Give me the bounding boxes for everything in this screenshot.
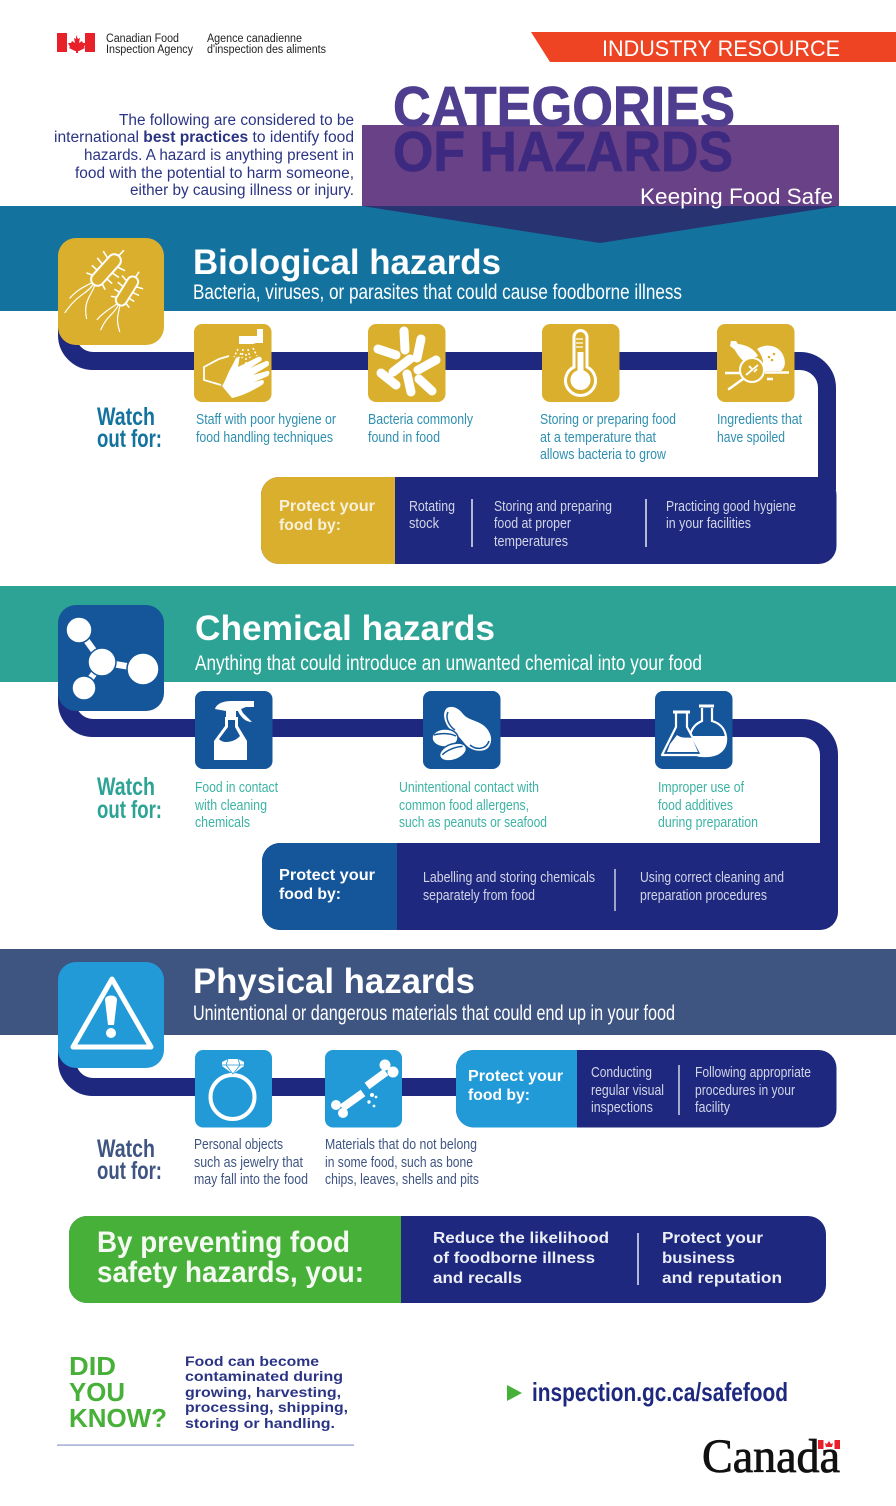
captions: biological risks: found in food: [368, 429, 440, 446]
captions: chemical risks: chemicals: [195, 814, 250, 831]
icon: spoiled ingredients: [717, 324, 794, 402]
logo: Canadian Food Inspection Agency: Inspection Agency: [106, 44, 193, 56]
icon: flasks: [655, 691, 732, 769]
captions: biological risks: Ingredients that: [717, 411, 803, 428]
heading: did you know: YOU: [69, 1377, 125, 1407]
protect box: chemical: Protect your: [279, 867, 375, 884]
protect box: biological: in your facilities: [666, 515, 751, 532]
label: watch out for: out for:: [97, 1157, 162, 1185]
protect box: chemical: food by:: [279, 886, 341, 903]
panel: chemical hazards: [0, 586, 896, 930]
text: contamination fact: contaminated during: [185, 1368, 343, 1384]
banner: industry resource: [531, 32, 896, 62]
subtitle: chemical: Anything that could introduce an unwanted chemical into your food: [195, 652, 702, 675]
protect box: biological: food at proper: [494, 515, 571, 532]
captions: biological risks: food handling techniques: [196, 429, 333, 446]
protect box: biological: Protect your: [279, 498, 375, 515]
logo: Canada wordmark: Canada: [702, 1430, 840, 1483]
protect box: biological: food by:: [279, 517, 341, 534]
captions: physical risks: in some food, such as bone: [325, 1154, 473, 1171]
protect box: physical: food by:: [468, 1087, 530, 1104]
protect box: biological: Practicing good hygiene: [666, 498, 796, 515]
label: watch out for: [97, 773, 162, 824]
icon: ring: [195, 1050, 272, 1128]
icon: molecule: [58, 605, 164, 711]
section banner: chemical: [0, 586, 896, 682]
protect box: chemical: Labelling and storing chemicals: [423, 869, 595, 886]
benefit: protect business: Protect your: [662, 1230, 763, 1247]
icon: warning triangle: [58, 962, 164, 1068]
label: watch out for: Watch: [97, 1135, 155, 1163]
label: watch out for: [97, 403, 162, 453]
protect box: physical: Following appropriate: [695, 1064, 811, 1081]
protect box: biological: [261, 477, 836, 564]
protect box: physical: Conducting: [591, 1064, 652, 1081]
captions: biological risks: Storing or preparing food: [540, 411, 676, 428]
icon: thermometer: [542, 324, 620, 402]
heading: by preventing food safety hazards: By preventing food: [97, 1226, 350, 1259]
protect box: biological: stock: [409, 515, 439, 532]
captions: chemical risks: food additives: [658, 797, 733, 814]
captions: biological risks: [196, 411, 803, 463]
subtitle: biological: Bacteria, viruses, or parasites that could cause foodborne illness: [193, 281, 682, 304]
heading: did you know: [69, 1351, 167, 1433]
icon: green arrow: [507, 1385, 522, 1401]
logo: Canadian Food Inspection Agency: d'inspection des aliments: [207, 44, 326, 56]
text: contamination fact: [185, 1353, 348, 1431]
protect box: biological: temperatures: [494, 533, 568, 550]
protect box: physical: inspections: [591, 1099, 653, 1116]
icon: hand washing: [194, 324, 272, 402]
intro text: hazards. A hazard is anything present in: [84, 147, 354, 164]
heading: by preventing food safety hazards: safety hazards, you:: [97, 1256, 364, 1289]
label: watch out for: [97, 1135, 162, 1185]
panel: did you know: [57, 1351, 354, 1446]
protect box: chemical: separately from food: [423, 887, 535, 904]
protect box: chemical: [262, 843, 838, 930]
logo: Canadian Food Inspection Agency: [57, 33, 326, 56]
banner: industry resource: INDUSTRY RESOURCE: [602, 36, 840, 61]
icon: bacteria: [56, 238, 164, 345]
captions: chemical risks: during preparation: [658, 814, 758, 831]
label: watch out for: out for:: [97, 796, 162, 824]
text: contamination fact: processing, shipping,: [185, 1399, 348, 1415]
text: contamination fact: storing or handling.: [185, 1415, 335, 1431]
panel: biological hazards: [0, 206, 896, 564]
label: watch out for: out for:: [97, 425, 162, 453]
captions: chemical risks: such as peanuts or seafood: [399, 814, 547, 831]
captions: biological risks: at a temperature that: [540, 429, 657, 446]
protect box: chemical: preparation procedures: [640, 887, 767, 904]
captions: biological risks: have spoiled: [717, 429, 785, 446]
benefit: reduce illness: of foodborne illness: [433, 1250, 595, 1267]
captions: physical risks: [194, 1136, 479, 1188]
icon: peanuts and allergens: [423, 691, 500, 769]
protect box: physical: regular visual: [591, 1082, 664, 1099]
intro text: international best practices to identify food: [54, 129, 354, 146]
protect box: physical: [456, 1050, 836, 1128]
protect box: physical: Protect your: [468, 1068, 563, 1085]
heading: chemical hazards: Chemical hazards: [195, 609, 495, 648]
benefit: protect business: business: [662, 1250, 735, 1267]
captions: physical risks: such as jewelry that: [194, 1154, 304, 1171]
intro text: food with the potential to harm someone,: [75, 165, 354, 182]
icon: small flag: [818, 1440, 840, 1449]
protect box: chemical: Using correct cleaning and: [640, 869, 784, 886]
captions: biological risks: Staff with poor hygiene or: [196, 411, 336, 428]
captions: chemical risks: common food allergens,: [399, 797, 529, 814]
connector track: biological: [67, 320, 827, 490]
icon: bacteria in food: [368, 324, 446, 402]
intro text: [54, 112, 354, 199]
captions: chemical risks: Improper use of: [658, 779, 745, 796]
connector track: chemical: [67, 690, 829, 860]
logo: Canadian Food Inspection Agency: Agence canadienne: [207, 33, 302, 45]
panel: title block: [362, 75, 839, 243]
text: contamination fact: growing, harvesting,: [185, 1384, 341, 1400]
captions: chemical risks: [194, 779, 758, 831]
captions: biological risks: Bacteria commonly: [368, 411, 473, 428]
heading: biological hazards: Biological hazards: [193, 243, 501, 282]
section banner: biological: [0, 206, 896, 311]
icon: spray bottle: [195, 691, 272, 769]
text: contamination fact: Food can become: [185, 1353, 319, 1369]
captions: physical risks: Personal objects: [194, 1136, 283, 1153]
section banner: physical: [0, 949, 896, 1035]
title: OF HAZARDS: [393, 120, 733, 184]
captions: chemical risks: with cleaning: [194, 797, 267, 814]
heading: physical hazards: Physical hazards: [193, 962, 475, 1001]
label: watch out for: Watch: [97, 403, 155, 431]
panel: physical hazards: [0, 949, 896, 1188]
captions: biological risks: allows bacteria to grow: [540, 446, 666, 463]
heading: did you know: KNOW?: [69, 1403, 167, 1433]
benefit: reduce illness: [433, 1230, 609, 1287]
intro text: either by causing illness or injury.: [130, 182, 354, 199]
label: watch out for: Watch: [97, 773, 155, 801]
purple title box with arrow: [362, 125, 839, 243]
logo: Canadian Food Inspection Agency: Canadian Food: [106, 33, 179, 45]
title: CATEGORIES: [393, 75, 735, 139]
protect box: biological: Rotating: [409, 498, 455, 515]
benefit: reduce illness: and recalls: [433, 1270, 522, 1287]
protect box: biological: Storing and preparing: [494, 498, 612, 515]
connector track: physical: [67, 1045, 470, 1087]
captions: physical risks: Materials that do not belong: [325, 1136, 477, 1153]
protect box: physical: procedures in your: [695, 1082, 795, 1099]
heading: did you know: DID: [69, 1351, 116, 1381]
protect box: physical: facility: [695, 1099, 730, 1116]
benefit: protect business: [662, 1230, 782, 1287]
benefit: protect business: and reputation: [662, 1270, 782, 1287]
icon: Canadian flag: [57, 33, 95, 53]
subtitle: keeping food safe: Keeping Food Safe: [640, 184, 833, 209]
heading: by preventing food safety hazards: [97, 1226, 364, 1289]
link: inspection.gc.ca/safefood: inspection.gc.ca/safefood: [532, 1377, 788, 1407]
captions: physical risks: may fall into the food: [194, 1171, 308, 1188]
captions: chemical risks: Unintentional contact with: [399, 779, 539, 796]
benefit: reduce illness: Reduce the likelihood: [433, 1230, 609, 1247]
subtitle: physical: Unintentional or dangerous materials that could end up in your food: [193, 1002, 675, 1025]
captions: chemical risks: Food in contact: [195, 779, 279, 796]
intro text: The following are considered to be: [119, 112, 354, 129]
captions: physical risks: chips, leaves, shells and pits: [325, 1171, 479, 1188]
panel: benefits bar: [69, 1216, 826, 1303]
icon: broken bone: [325, 1050, 402, 1128]
title: [393, 75, 735, 184]
